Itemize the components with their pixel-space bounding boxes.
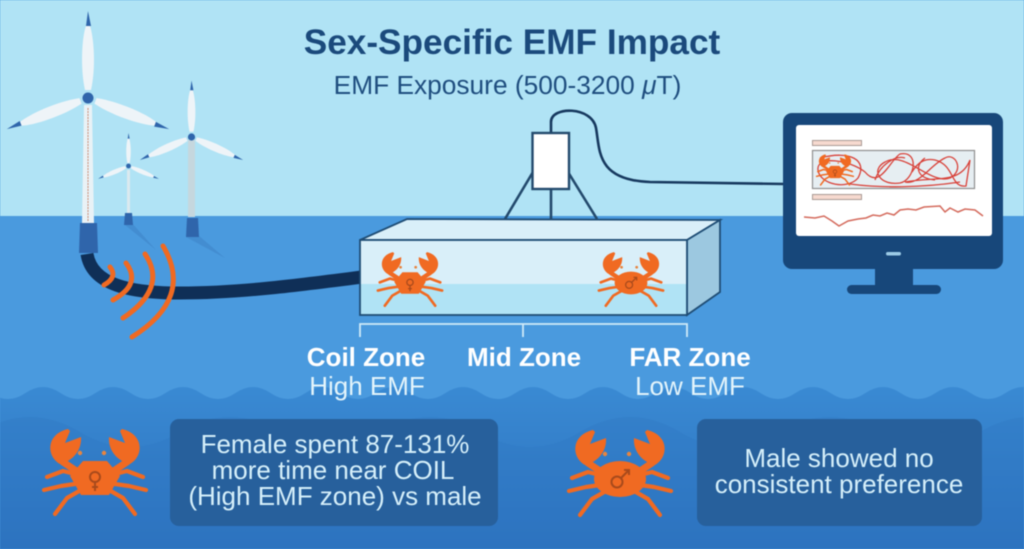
zone labels: Coil Zone	[307, 342, 425, 372]
sensor cable	[551, 111, 785, 184]
subsea cable	[87, 254, 362, 293]
female crab in tank	[378, 252, 442, 306]
turbine: large front	[5, 11, 171, 253]
crab in tracking	[817, 154, 853, 185]
panel: female result: more time near COIL	[212, 455, 454, 485]
turbine: medium rear	[138, 80, 245, 258]
big female crab	[44, 429, 146, 514]
panel: male result: Male showed no	[744, 443, 934, 473]
zone labels: Mid Zone	[467, 342, 581, 372]
panel: female result	[170, 419, 498, 526]
movement path	[818, 154, 970, 187]
title: Sex-Specific EMF Impact	[304, 23, 721, 62]
lower waves	[0, 387, 1024, 549]
zone labels: High EMF	[309, 371, 425, 401]
panel: male result: consistent preference	[715, 469, 963, 499]
zone labels	[307, 342, 751, 401]
monitor	[783, 113, 1003, 294]
zone labels: FAR Zone	[629, 342, 751, 372]
big male crab	[569, 430, 671, 515]
zone bracket	[360, 324, 687, 337]
EMF arcs	[104, 246, 173, 337]
sensor tripod	[505, 172, 597, 219]
sea background	[0, 216, 1024, 549]
tracking arena	[812, 150, 974, 188]
activity trace	[804, 206, 983, 226]
panel: male result	[697, 419, 982, 526]
sky background	[0, 0, 1024, 217]
sensor box	[532, 133, 569, 189]
tracking bars	[812, 140, 862, 146]
turbine: small rear	[97, 133, 160, 250]
experiment tank	[360, 219, 720, 315]
panel: female result: (High EMF zone) vs male	[188, 481, 482, 511]
zone labels: Low EMF	[635, 371, 745, 401]
male crab in tank	[599, 252, 663, 306]
panel: female result: Female spent 87-131%	[201, 429, 469, 459]
subtitle: EMF Exposure (500-3200 μT)	[334, 70, 681, 100]
